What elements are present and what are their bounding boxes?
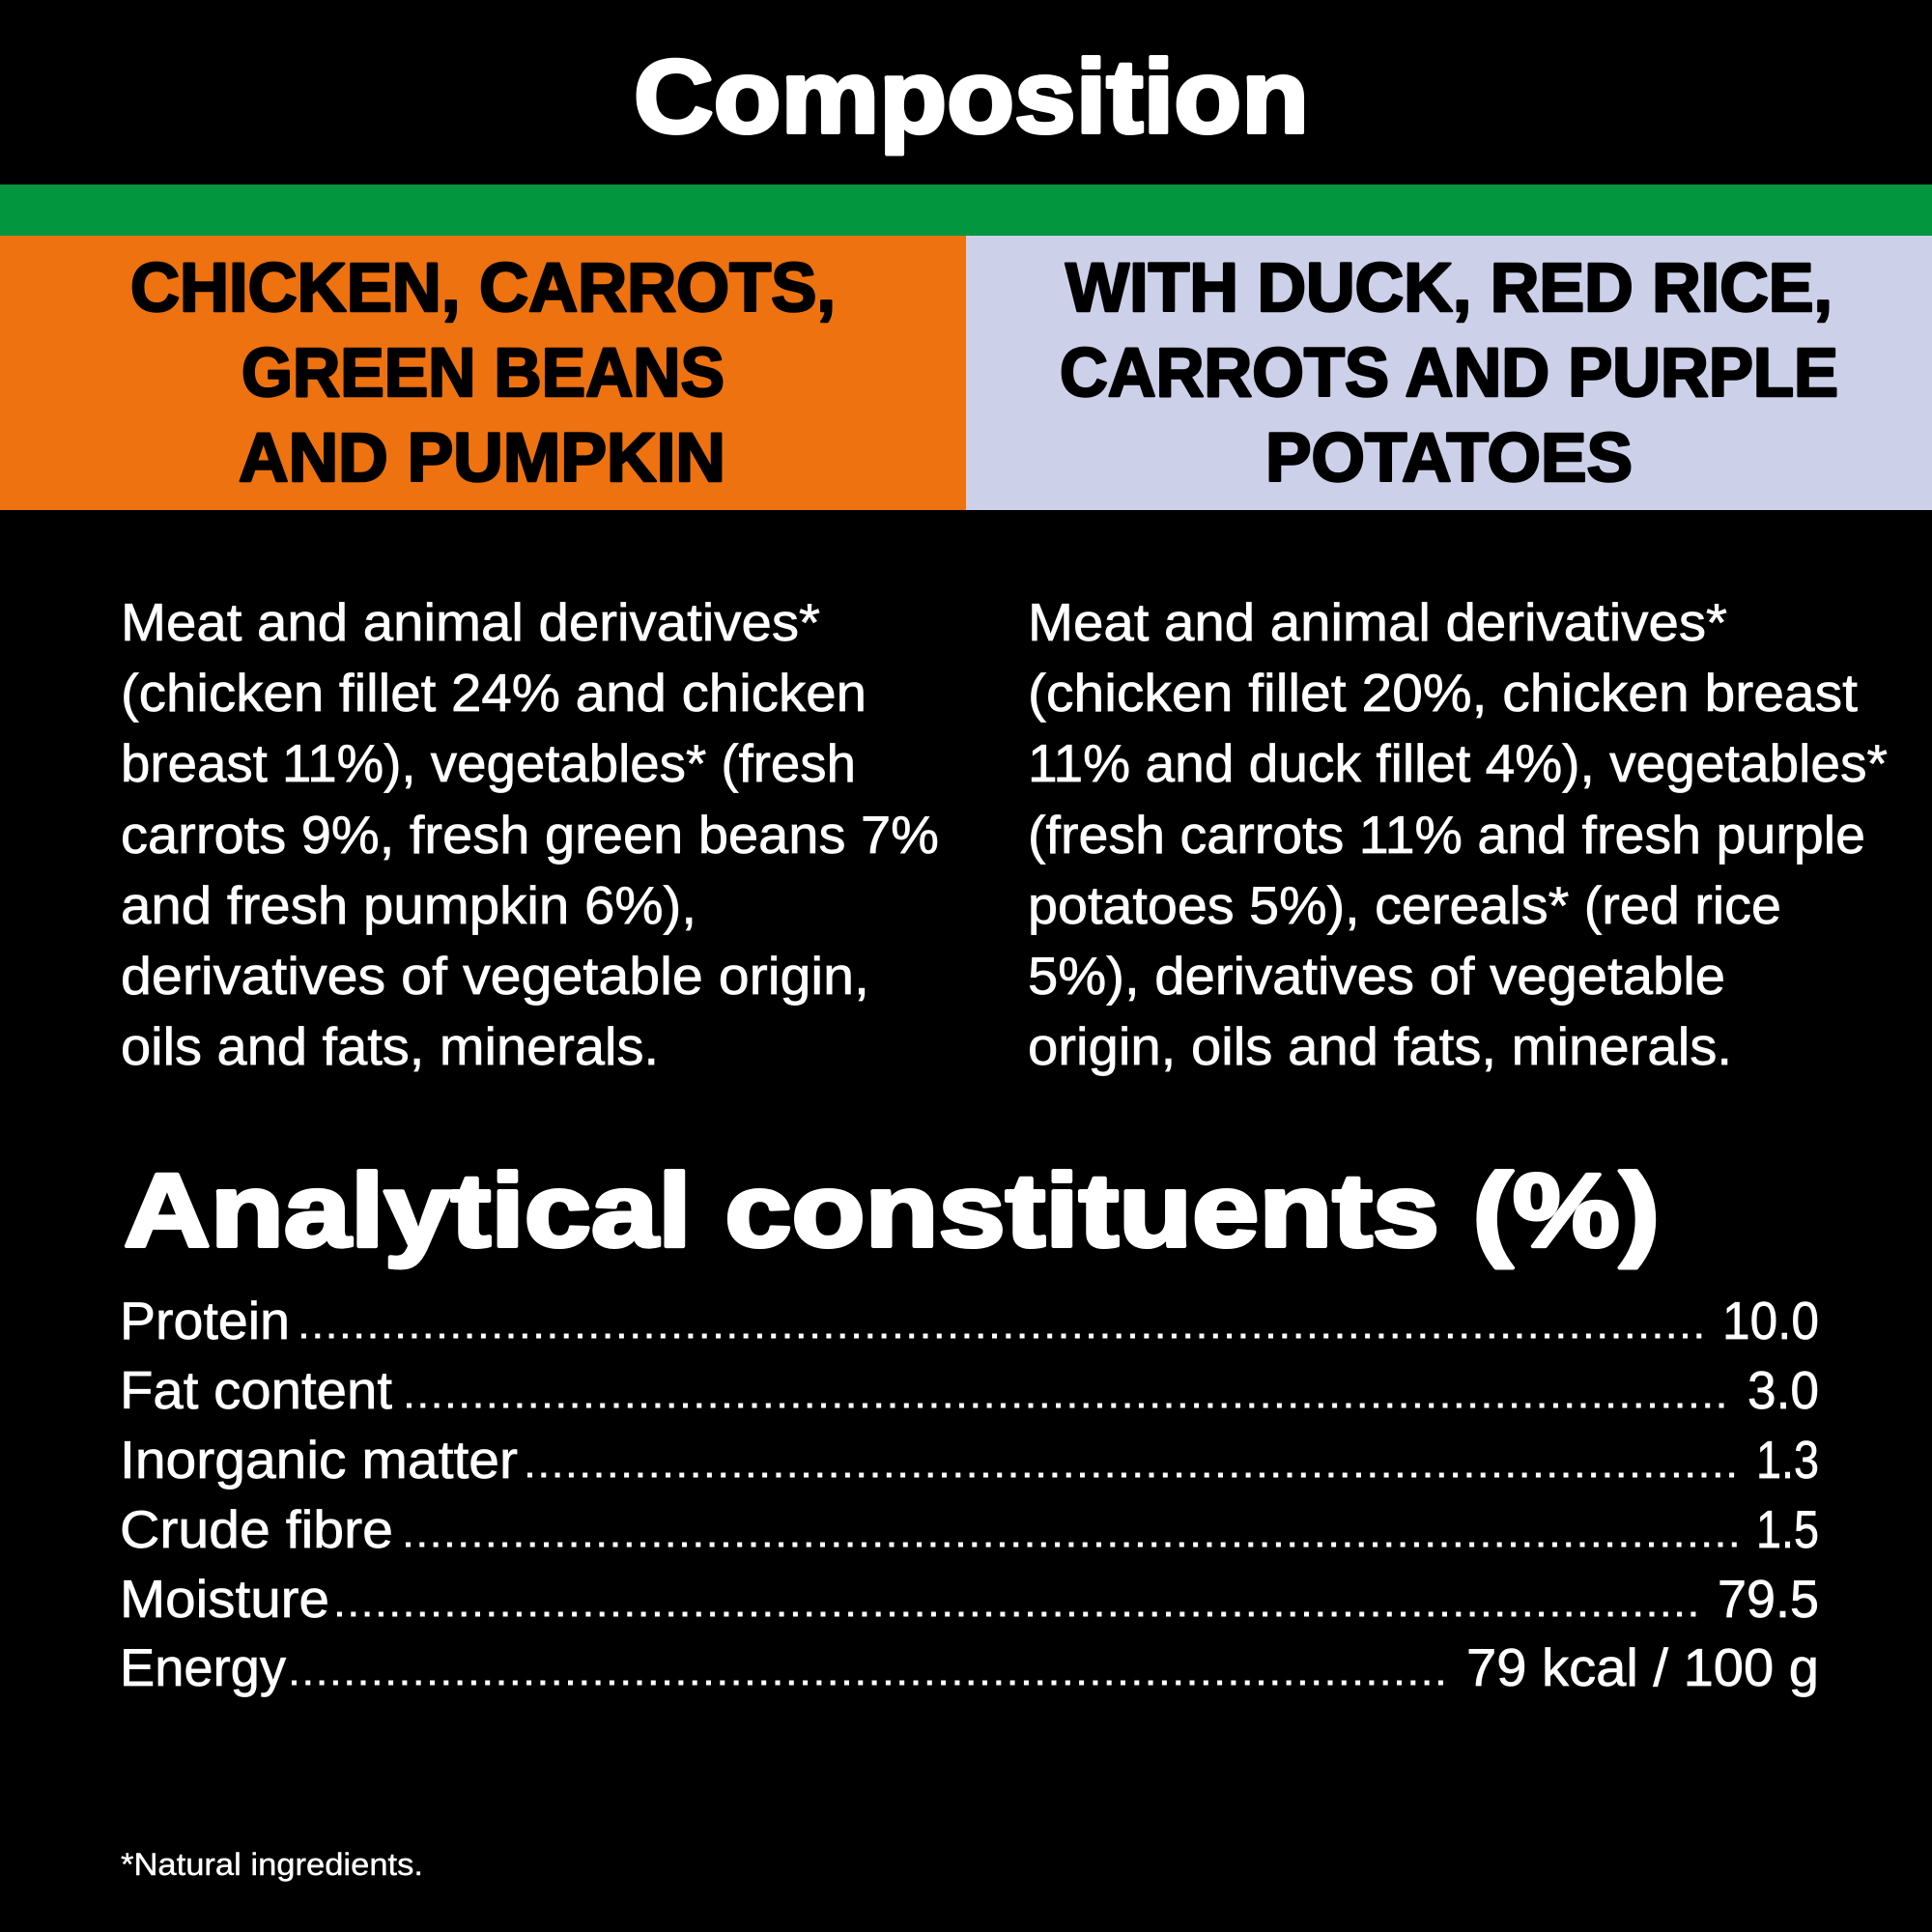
- text block: chicken variety composition: (chicken fillet 24% and chicken: [121, 663, 867, 723]
- text block: duck variety composition: Meat and animal derivatives*: [1028, 592, 1727, 652]
- panel: duck variety heading: WITH DUCK, RED RICE,: [1065, 250, 1833, 327]
- text block: duck variety composition: potatoes 5%), cereals* (red rice: [1028, 875, 1781, 935]
- row: crude fibre: 1.5: [1756, 1499, 1819, 1559]
- text block: duck variety composition: origin, oils and fats, minerals.: [1028, 1016, 1732, 1076]
- row: crude fibre: Crude fibre: [120, 1499, 393, 1559]
- row: energy: Energy: [120, 1637, 286, 1697]
- row: fat content: Fat content: [120, 1360, 392, 1420]
- panel: duck variety heading: POTATOES: [1265, 420, 1633, 497]
- text block: chicken variety composition: and fresh pumpkin 6%),: [121, 875, 696, 935]
- row: protein: 10.0: [1722, 1291, 1819, 1350]
- table: analytical constituents values: [120, 1291, 1819, 1697]
- text block: duck variety composition: [1028, 592, 1888, 1076]
- panel: chicken variety heading: CHICKEN, CARROTS,: [130, 250, 836, 327]
- row: fat content: 3.0: [1747, 1360, 1819, 1420]
- panel: chicken variety heading: GREEN BEANS: [242, 335, 724, 412]
- text block: duck variety composition: 5%), derivatives of vegetable: [1028, 946, 1725, 1006]
- text block: chicken variety composition: oils and fats, minerals.: [121, 1016, 659, 1076]
- row: energy: 79 kcal / 100 g: [1466, 1637, 1819, 1697]
- text block: chicken variety composition: derivatives of vegetable origin,: [121, 946, 869, 1006]
- text block: duck variety composition: (chicken fillet 20%, chicken breast: [1028, 663, 1858, 723]
- row: crude fibre: [120, 1499, 1819, 1559]
- row: moisture: [120, 1569, 1819, 1629]
- row: moisture: Moisture: [120, 1569, 329, 1629]
- panel: duck variety heading: CARROTS AND PURPLE: [1060, 335, 1838, 412]
- title: Composition: [634, 38, 1309, 155]
- green band: [0, 185, 1932, 236]
- row: energy: [120, 1637, 1819, 1697]
- panel: chicken variety heading: AND PUMPKIN: [239, 420, 725, 497]
- row: fat content: [120, 1360, 1819, 1420]
- text block: chicken variety composition: Meat and animal derivatives*: [121, 592, 820, 652]
- footnote: *Natural ingredients.: [121, 1847, 423, 1882]
- row: protein: Protein: [120, 1291, 290, 1350]
- text block: chicken variety composition: [121, 592, 939, 1076]
- row: inorganic matter: [120, 1430, 1819, 1490]
- heading: analytical constituents: Analytical constituents (%): [124, 1151, 1660, 1268]
- text block: duck variety composition: (fresh carrots 11% and fresh purple: [1028, 805, 1865, 865]
- row: protein: [120, 1291, 1819, 1350]
- row: inorganic matter: 1.3: [1756, 1430, 1819, 1490]
- text block: chicken variety composition: breast 11%), vegetables* (fresh: [121, 733, 856, 793]
- panel: chicken variety heading: [0, 236, 966, 510]
- row: moisture: 79.5: [1718, 1569, 1819, 1629]
- panel: duck variety heading: [966, 236, 1932, 510]
- text block: duck variety composition: 11% and duck fillet 4%), vegetables*: [1028, 733, 1888, 793]
- text block: chicken variety composition: carrots 9%, fresh green beans 7%: [121, 805, 939, 865]
- row: inorganic matter: Inorganic matter: [120, 1430, 518, 1490]
